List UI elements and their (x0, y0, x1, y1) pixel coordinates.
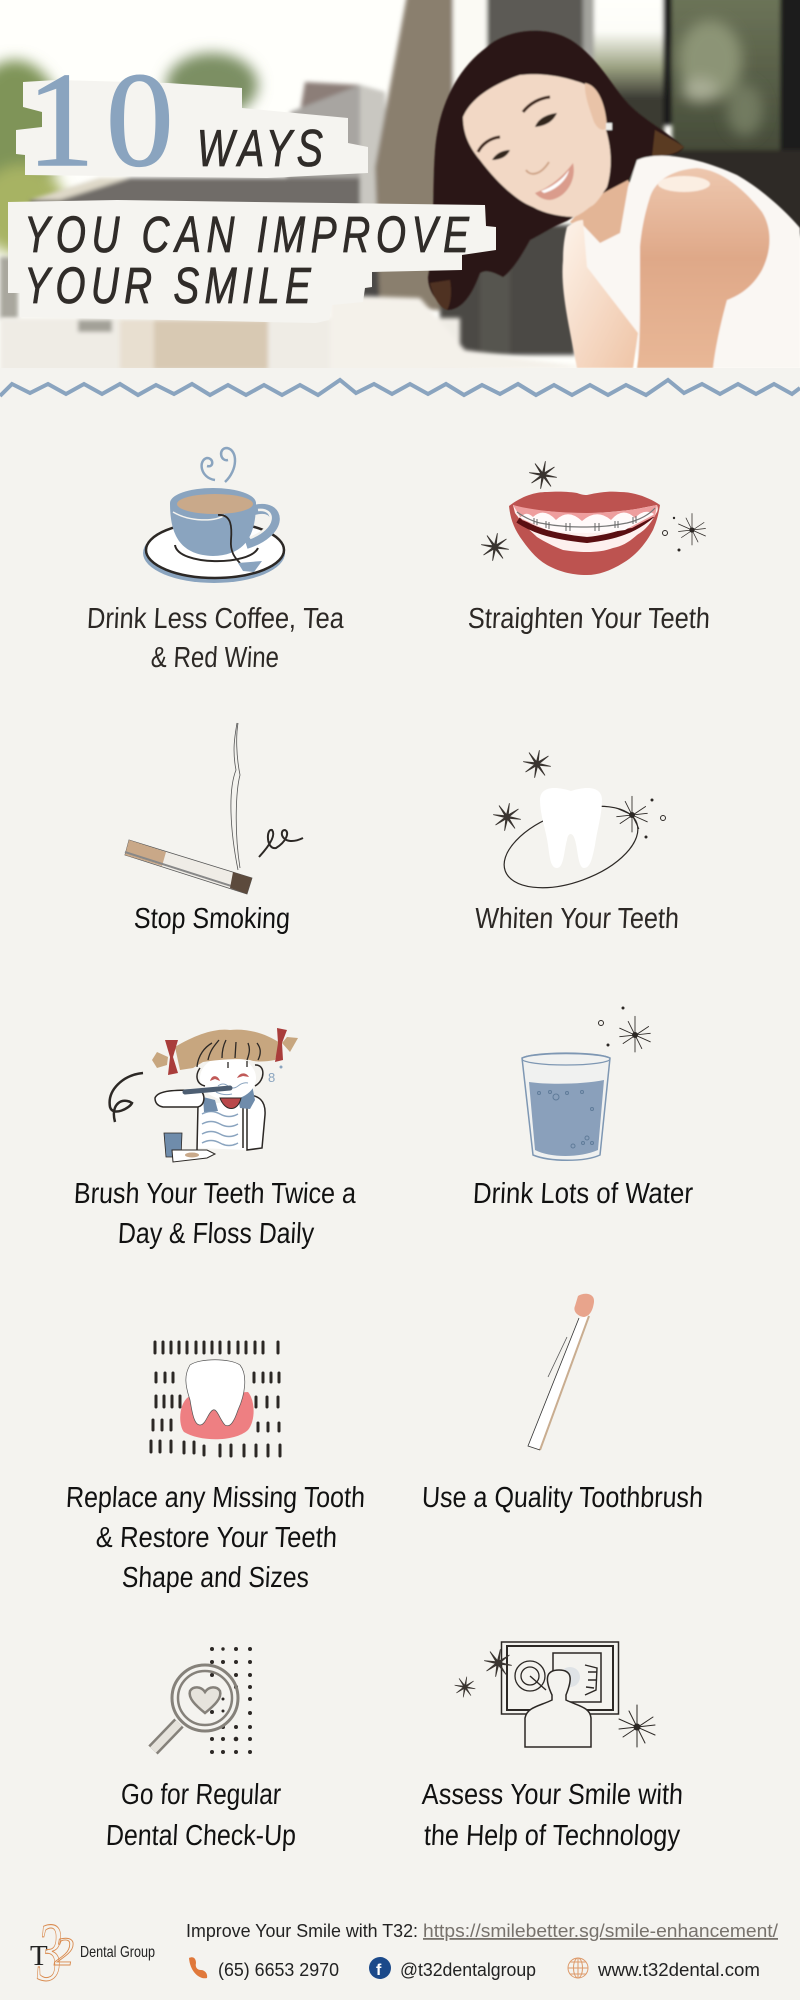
link line (186, 1921, 778, 1941)
icon: person at screen (455, 1642, 655, 1747)
label: Whiten Your Teeth (474, 903, 680, 935)
icon: magnifier with heart (153, 1647, 252, 1754)
label: Drink Less Coffee, Tea (86, 603, 346, 635)
icon: globe (568, 1958, 588, 1978)
icon: glass of water (522, 1006, 650, 1160)
title strip: 10 ways (16, 46, 368, 195)
icon: tooth in gum with dashes (151, 1342, 280, 1456)
label: Assess Your Smile with (421, 1779, 684, 1811)
item 3: stop smoking (125, 723, 303, 935)
icon: toothbrush (528, 1294, 594, 1450)
icon: facebook: f (376, 1962, 382, 1979)
icon: facebook (369, 1957, 391, 1979)
icon: cigarette with smoke (125, 723, 303, 894)
item 5: brush your teeth (73, 1028, 358, 1250)
logo: T32 Dental Group: T (30, 1940, 48, 1972)
neck (570, 179, 630, 244)
white top (583, 156, 800, 368)
label: Go for Regular (120, 1779, 282, 1811)
item 7: replace any missing tooth (65, 1342, 366, 1594)
label: Drink Lots of Water (472, 1178, 694, 1210)
logo: T32 Dental Group: Dental Group (80, 1944, 155, 1961)
icon: white tooth with sparkles (493, 750, 666, 904)
item 10: assess your smile with technology (421, 1642, 684, 1852)
link line: Improve Your Smile with T32: (186, 1921, 418, 1941)
website: www.t32dental.com (597, 1960, 760, 1980)
footer (30, 1905, 778, 1998)
item 9: regular dental check-up: Dental Check-Up (105, 1820, 297, 1852)
title strip: you can improve your smile: YOU CAN IMPROVE (24, 206, 470, 263)
title strip: 10 ways: 10 (27, 46, 174, 195)
icon: tea cup (143, 448, 285, 583)
title strip: 10 ways: WAYS (197, 119, 323, 177)
facebook handle: @t32dentalgroup (400, 1960, 536, 1980)
phone number: (65) 6653 2970 (218, 1960, 339, 1980)
zigzag divider (0, 380, 800, 396)
logo: T32 Dental Group: 2 (54, 1929, 74, 1974)
item 1: drink less coffee, tea and red wine: & Red Wine (150, 642, 280, 674)
item 7: replace any missing tooth: & Restore Your Teeth (95, 1522, 338, 1554)
label: Straighten Your Teeth (467, 603, 711, 635)
item 7: replace any missing tooth: Shape and Sizes (121, 1562, 310, 1594)
mouth (535, 163, 574, 200)
icon: girl brushing teeth (110, 1028, 298, 1162)
hero photo: smiling woman (0, 0, 800, 375)
item 6: drink lots of water (472, 1006, 694, 1210)
logo: T32 Dental Group (30, 1905, 155, 1998)
item 9: regular dental check-up (105, 1647, 297, 1852)
icon: phone (189, 1957, 207, 1978)
icon: girl brushing teeth: 8 (268, 1070, 275, 1085)
nose (526, 162, 549, 174)
title strip: you can improve your smile: YOUR SMILE (24, 257, 312, 314)
brows and eyes (523, 97, 550, 112)
item 4: whiten your teeth (474, 750, 680, 935)
label: Brush Your Teeth Twice a (73, 1178, 358, 1210)
item 2: straighten your teeth (467, 461, 711, 635)
label: Replace any Missing Tooth (65, 1482, 366, 1514)
face (463, 74, 611, 217)
shoulder and arm (637, 168, 770, 368)
item 5: brush your teeth: Day & Floss Daily (117, 1218, 315, 1250)
near arm (562, 220, 638, 368)
hair (428, 31, 684, 310)
item 1: drink less coffee, tea and red wine (86, 448, 346, 674)
logo: T32 Dental Group: 3 (36, 1905, 62, 1998)
label: Stop Smoking (133, 903, 291, 935)
title strip: you can improve your smile (8, 200, 496, 323)
item 8: use a quality toothbrush (421, 1294, 704, 1514)
icon: smiling lips with braces (481, 461, 706, 575)
link line: https://smilebetter.sg/smile-enhancement/ (423, 1921, 778, 1941)
label: Use a Quality Toothbrush (421, 1482, 704, 1514)
item 10: assess your smile with technology: the Help of Technology (423, 1820, 681, 1852)
